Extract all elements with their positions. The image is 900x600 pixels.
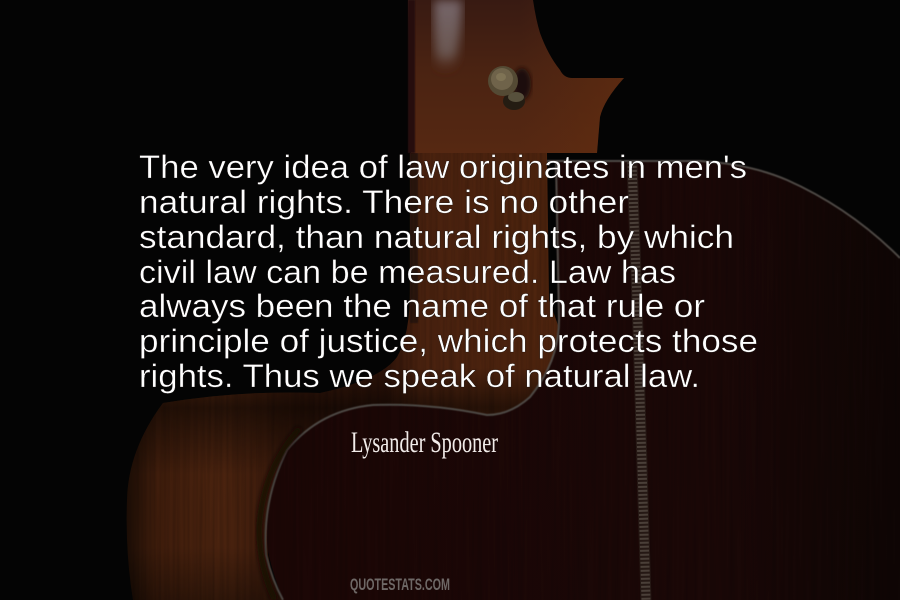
quote text: The very idea of law originates in men's [139,149,747,185]
guitar neck heel [408,0,624,153]
purfling strip [632,162,646,600]
author name: Lysander Spooner [351,426,498,459]
guitar body top [264,160,900,600]
strap button [488,66,531,110]
quote text: standard, than natural rights, by which [139,219,734,255]
wood grain [174,153,546,584]
binding shadow [259,428,300,600]
neck highlight [434,0,462,72]
quote text: rights. Thus we speak of natural law. [139,358,700,394]
watermark: QUOTESTATS.COM [350,576,450,594]
quote text: civil law can be measured. Law has [139,254,676,290]
body binding edge [265,161,900,600]
quote text: always been the name of that rule or [139,288,705,324]
quote text: principle of justice, which protects those [139,323,758,359]
quote text [139,149,758,394]
guitar side wood [127,153,558,600]
quote text: natural rights. There is no other [139,184,629,220]
